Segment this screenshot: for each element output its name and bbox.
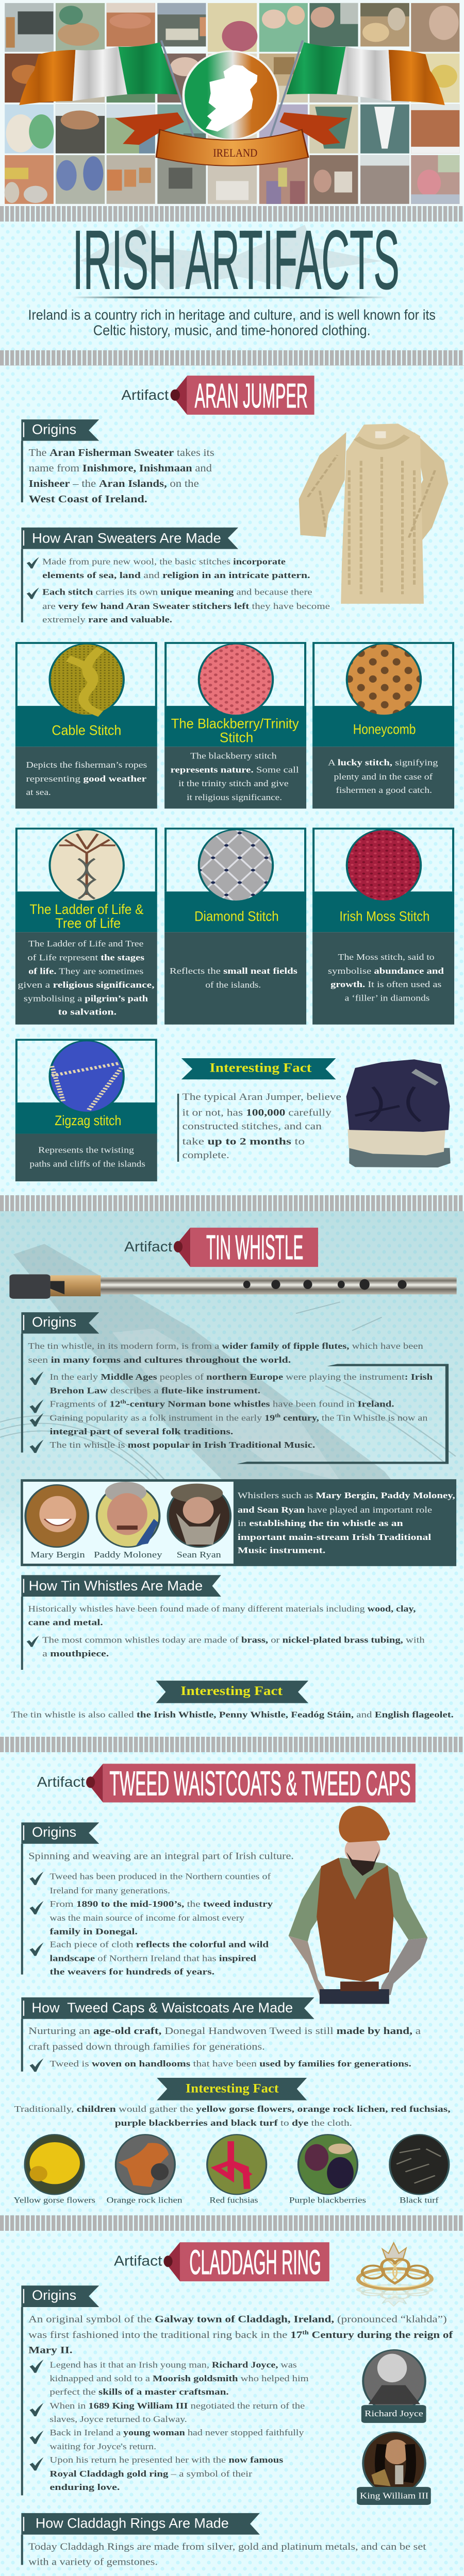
card: Zigzag stitch: Represents the twisting (38, 1145, 134, 1155)
how made bullets continued: extremely rare and valuable. (42, 615, 172, 624)
origins text and bullets: th (120, 1399, 126, 1404)
heading: Origins (21, 1312, 99, 1334)
intro text (28, 307, 436, 338)
card: Diamond Stitch: of the islands. (205, 979, 261, 990)
origins text and bullets: The tin whistle is most popular in Irish Traditional Music. (49, 1440, 315, 1450)
origins text (21, 441, 214, 505)
interesting fact text: The tin whistle is also called the Irish Whistle, Penny Whistle, Feadóg Stáin, and English flageolet. (11, 1709, 454, 1719)
how made text (21, 2535, 426, 2567)
card: Blackberry/Trinity Stitch: Stitch (220, 730, 253, 745)
how made bullets: Made from pure new wool, the basic stitches incorporate (42, 556, 286, 566)
heading: How Tweed Caps and Waistcoats Are Made (21, 1997, 314, 2019)
origins text and bullets: th (275, 1413, 281, 1418)
interesting fact text: The typical Aran Jumper, believe (183, 1092, 341, 1103)
origins text and bullets: Ireland for many generations. (49, 1886, 170, 1895)
how made text: The most common whistles today are made of brass, or nickel-plated brass tubing, with (42, 1635, 425, 1645)
whistlers text: in establishing the tin whistle as an (238, 1518, 403, 1528)
interesting fact text: complete. (183, 1150, 229, 1160)
dye source: red fuchsias: Red fuchsias (209, 2196, 258, 2205)
card: Blackberry/Trinity Stitch: The Blackberry/Trinity (171, 716, 299, 732)
card: Ladder of Life and Tree of Life: given a religious significance, (18, 979, 155, 990)
card: Diamond Stitch (164, 827, 306, 1025)
card: Honeycomb: Honeycomb (353, 722, 416, 737)
origins text and bullets: waiting for Joyce's return. (49, 2442, 156, 2451)
icon: stack of folded sweaters (346, 1059, 451, 1167)
section: Tweed Waistcoats and Caps (13, 1764, 451, 2205)
whistlers text: Music instrument. (238, 1545, 325, 1555)
portrait: Paddy Moloney (97, 1482, 159, 1547)
icon: small claddagh ring (358, 2243, 432, 2306)
origins text and bullets: -century Norman bone whistles (126, 1399, 270, 1409)
origins text and bullets: the weavers for hundreds of years. (49, 1967, 214, 1976)
background: tinted whistle and sheet music photo (0, 1211, 464, 1566)
portrait: Mary Bergin (25, 1485, 88, 1547)
heading: Origins: Origins (32, 1825, 76, 1840)
card: Ladder of Life and Tree of Life: Tree of Life (55, 916, 121, 931)
how made text (21, 1597, 425, 1670)
origins text and bullets (21, 2307, 453, 2495)
how made text: with a variety of gemstones. (28, 2556, 158, 2567)
card: Ladder of Life and Tree of Life (15, 827, 157, 1025)
card: Honeycomb: fishermen a good catch. (336, 785, 432, 795)
card: Honeycomb: A lucky stitch, signifying (328, 757, 438, 767)
how made text: cane and metal. (28, 1617, 103, 1627)
card: Zigzag stitch: paths and cliffs of the islands (29, 1159, 145, 1168)
card: Blackberry/Trinity Stitch: it religious significance. (187, 792, 282, 802)
origins text and bullets: enduring love. (49, 2482, 120, 2492)
interesting fact text: take up to 2 months to (183, 1137, 305, 1147)
card: Cable Stitch: Cable Stitch (52, 723, 121, 738)
origins text and bullets: seen in many forms and cultures throughout the world. (28, 1354, 291, 1365)
origins text and bullets: slaves, Joyce returned to Galway. (49, 2414, 187, 2424)
section: Aran Jumper intro (0, 307, 464, 622)
card: Blackberry/Trinity Stitch: represents nature. Some call (171, 765, 299, 774)
heading: How Claddagh Rings Are Made: How Claddagh Rings Are Made (36, 2516, 229, 2531)
divider stripes (0, 350, 464, 365)
how made bullets continued (42, 601, 330, 624)
how made text: Nurturing an age-old craft, Donegal Handwoven Tweed is still made by hand, a (28, 2026, 421, 2037)
whistlers text: and Sean Ryan have played an important role (238, 1505, 432, 1515)
banner: Interesting Fact (157, 2078, 307, 2100)
origins text and bullets: When in 1689 King William III negotiated the return of the (49, 2401, 305, 2411)
how made bullets continued: are very few hand Aran Sweater stitchers left they have become (42, 601, 330, 611)
how made text: craft passed down through families for generations. (28, 2041, 265, 2052)
card: Ladder of Life and Tree of Life: of Life represent the stages (27, 953, 144, 962)
origins text and bullets: landscape of Northern Ireland that has inspired (49, 1953, 257, 1963)
artifact tag: Aran Jumper: Artifact (121, 387, 169, 403)
origins text and bullets (21, 1844, 294, 1976)
callout frame (237, 1364, 449, 1464)
divider stripes (0, 350, 464, 365)
banner: Interesting Fact: Interesting Fact (186, 2081, 279, 2096)
heading: Origins (21, 2285, 99, 2307)
artifact tag: Claddagh Ring: Artifact (114, 2252, 162, 2268)
divider stripes (0, 1195, 464, 1211)
card: Irish Moss Stitch: symbolise abundance and (328, 965, 444, 976)
origins text: Inisheer – the Aran Islands, on the (29, 478, 199, 489)
portrait: King William III (357, 2432, 431, 2505)
interesting fact text (177, 1092, 341, 1162)
origins text and bullets: Each piece of cloth reflects the colorful and wild (49, 1939, 269, 1949)
ribbon: Ireland banner: IRELAND (213, 147, 257, 159)
origins text and bullets: Spinning and weaving are an integral part of Irish culture. (28, 1851, 294, 1861)
icon: man in tweed cap and waistcoat (289, 1806, 427, 2004)
origins text: The Aran Fisherman Sweater takes its (29, 447, 214, 459)
artifact tag: Tin Whistle: Artifact (124, 1239, 172, 1255)
flag: left Irish flag (19, 40, 194, 138)
portrait: King William III: King William III (360, 2490, 428, 2501)
dye source: yellow gorse flowers (13, 2134, 95, 2205)
card: Irish Moss Stitch: a ‘filler’ in diamonds (345, 993, 429, 1003)
card: Cable Stitch (15, 642, 157, 808)
zigzag card and interesting fact (15, 1039, 451, 1181)
origins text and bullets: perfect the skills of a master craftsman. (49, 2387, 229, 2397)
how made text: Tweed is woven on handlooms that have been used by families for generations. (49, 2058, 411, 2069)
origins text and bullets: Royal Claddagh gold ring – a symbol of their (49, 2469, 253, 2479)
banner: Interesting Fact (156, 1681, 308, 1703)
dye source: red fuchsias (207, 2134, 267, 2205)
card: Diamond Stitch: Diamond Stitch (194, 909, 279, 924)
whistler names: Sean Ryan (177, 1549, 221, 1560)
how made bullets: Each stitch carries its own unique meaning and because there (42, 587, 312, 597)
origins text and bullets: Tweed has been produced in the Northern counties of (49, 1871, 271, 1881)
interesting fact text: purple blackberries and black turf to dye the cloth. (115, 2118, 352, 2128)
stitch cards (15, 601, 454, 1025)
icon: cream Aran sweater (299, 423, 449, 604)
whistler names (30, 1549, 221, 1560)
whistler names: Mary Bergin (30, 1549, 85, 1560)
dye source: yellow gorse flowers: Yellow gorse flowers (13, 2196, 95, 2205)
divider stripes (0, 2215, 464, 2231)
how made bullets: elements of sea, land and religion in an intricate pattern. (42, 570, 310, 580)
interesting fact text (14, 2104, 451, 2128)
dye source: orange rock lichen (107, 2134, 183, 2205)
origins text and bullets: was first fashioned into the traditional ring back in the 17 (28, 2330, 349, 2341)
banner: Interesting Fact: Interesting Fact (180, 1684, 283, 1698)
divider stripes (0, 206, 464, 222)
card: Ladder of Life and Tree of Life: The Ladder of Life and Tree (28, 939, 143, 948)
heading: Origins: Origins (32, 422, 76, 437)
origins text and bullets: Legend has it that an Irish young man, Richard Joyce, was (49, 2360, 297, 2369)
heading: How Aran Sweaters Are Made: How Aran Sweaters Are Made (32, 531, 221, 546)
card: Zigzag stitch (15, 1039, 157, 1181)
origins text and bullets: Brehon Law describes a flute-like instrument. (49, 1385, 260, 1396)
interesting fact text: it or not, has 100,000 carefully (183, 1107, 332, 1118)
how made text (21, 2019, 421, 2072)
card: Zigzag stitch: Zigzag stitch (55, 1113, 121, 1128)
banner: Interesting Fact (181, 1058, 336, 1079)
card: Cable Stitch: representing good weather (26, 774, 146, 784)
how made bullets (21, 549, 312, 622)
origins text and bullets: have been found in Ireland. (273, 1399, 404, 1409)
origins text and bullets (21, 1334, 433, 1453)
header collage (0, 0, 464, 206)
card: Irish Moss Stitch (312, 827, 454, 1025)
heading: How Aran Sweaters Are Made (21, 528, 238, 549)
whistler names: Paddy Moloney (94, 1549, 162, 1560)
card: Blackberry/Trinity Stitch (164, 642, 306, 808)
dye source: black turf (390, 2134, 449, 2205)
origins text and bullets: Back in Ireland a young woman had never stopped faithfully (49, 2428, 304, 2437)
artifact tag: Tin Whistle (124, 1228, 318, 1267)
origins text and bullets: family in Donegal. (49, 1926, 138, 1936)
section: Tin Whistle (0, 1211, 464, 1719)
card: Irish Moss Stitch: The Moss stitch, said to (338, 952, 435, 962)
heading: How Claddagh Rings Are Made (21, 2513, 260, 2535)
portrait: Sean Ryan (168, 1484, 230, 1547)
divider stripes (0, 1737, 464, 1752)
ribbon: Ireland banner (115, 112, 347, 166)
portrait: Richard Joyce (361, 2350, 426, 2423)
dye source: purple blackberries (289, 2134, 366, 2205)
artifact tag: Aran Jumper (121, 376, 314, 415)
how made text: a mouthpiece. (42, 1649, 109, 1658)
artifact tag: Claddagh Ring (114, 2242, 329, 2282)
how made text: Historically whistles have been found made of many different materials including wood, clay, (28, 1604, 416, 1614)
origins text and bullets: kidnapped and sold to a Moorish goldsmith who helped him (49, 2374, 309, 2383)
card: Blackberry/Trinity Stitch: The blackberry stitch (190, 751, 277, 760)
interesting fact text: constructed stitches, and can (183, 1121, 322, 1132)
card: Cable Stitch: at sea. (26, 787, 51, 797)
panel: famous whistlers (21, 1479, 456, 1566)
photo grid (0, 0, 464, 206)
artifact tag: Tweed Waistcoats and Tweed Caps: Artifact (37, 1774, 85, 1790)
heading: How Tin Whistles Are Made: How Tin Whistles Are Made (29, 1579, 203, 1594)
section: Claddagh Ring (21, 2242, 453, 2576)
card: Blackberry/Trinity Stitch: it the trinity stitch and give (178, 778, 289, 788)
emblem: oval with map of Ireland (184, 51, 278, 140)
heading: How Tweed Caps and Waistcoats Are Made: How Tweed Caps & Waistcoats Are Made (31, 2001, 293, 2015)
origins text and bullets: From 1890 to the mid-1900’s, the tweed industry (49, 1899, 273, 1909)
card: Cable Stitch: Depicts the fisherman’s ropes (26, 760, 147, 770)
origins text and bullets: th (302, 2330, 309, 2336)
icon: tin whistle (9, 1275, 457, 1299)
origins text and bullets: was the main source of income for almost every (49, 1913, 245, 1923)
heading: Origins: Origins (32, 2288, 76, 2303)
card: Ladder of Life and Tree of Life: to salvation. (58, 1007, 117, 1016)
origins text and bullets: In the early Middle Ages peoples of northern Europe were playing the instrument: Irish (49, 1372, 433, 1382)
origins text and bullets: Fragments of 12 (49, 1399, 123, 1409)
origins text and bullets: An original symbol of the Galway town of Claddagh, Ireland, (pronounced “klahda”) (28, 2314, 447, 2325)
origins text and bullets: Gaining popularity as a folk instrument in the early 19 (49, 1413, 328, 1422)
card: Irish Moss Stitch: growth. It is often used as (330, 979, 441, 989)
card: Diamond Stitch: Reflects the small neat fields (170, 965, 297, 976)
origins text: name from Inishmore, Inishmaan and (29, 463, 212, 474)
heading: Origins (21, 1822, 99, 1844)
portrait: Richard Joyce: Richard Joyce (364, 2409, 423, 2418)
card: Ladder of Life and Tree of Life: symbolising a pilgrim’s path (24, 993, 148, 1003)
flag: right Irish flag (270, 40, 445, 138)
heading: How Tin Whistles Are Made (21, 1575, 221, 1597)
dye source: black turf: Black turf (400, 2196, 439, 2205)
banner: Interesting Fact: Interesting Fact (209, 1061, 311, 1075)
dye source: orange rock lichen: Orange rock lichen (107, 2196, 183, 2205)
heading: Origins (21, 419, 99, 441)
origins text and bullets: integral part of several folk traditions. (49, 1427, 233, 1436)
origins text and bullets: century, (280, 1413, 319, 1422)
origins text and bullets: the Tin Whistle is now an (322, 1413, 462, 1422)
card: Ladder of Life and Tree of Life: of life. They are sometimes (28, 966, 143, 976)
origins text: West Coast of Ireland. (29, 493, 147, 505)
origins text and bullets: The tin whistle, in its modern form, is from a wider family of fipple flutes, which have been (28, 1341, 423, 1351)
whistlers text (238, 1490, 455, 1555)
heading: Origins: Origins (32, 1315, 76, 1330)
card: Ladder of Life and Tree of Life: The Ladder of Life & (29, 902, 143, 917)
origins text and bullets: Upon his return he presented her with the now famous (49, 2455, 284, 2465)
origins text and bullets: Mary II. (28, 2345, 73, 2355)
card: Honeycomb: plenty and in the case of (334, 772, 433, 782)
card: Honeycomb (312, 642, 454, 808)
dye source: purple blackberries: Purple blackberries (289, 2196, 366, 2205)
